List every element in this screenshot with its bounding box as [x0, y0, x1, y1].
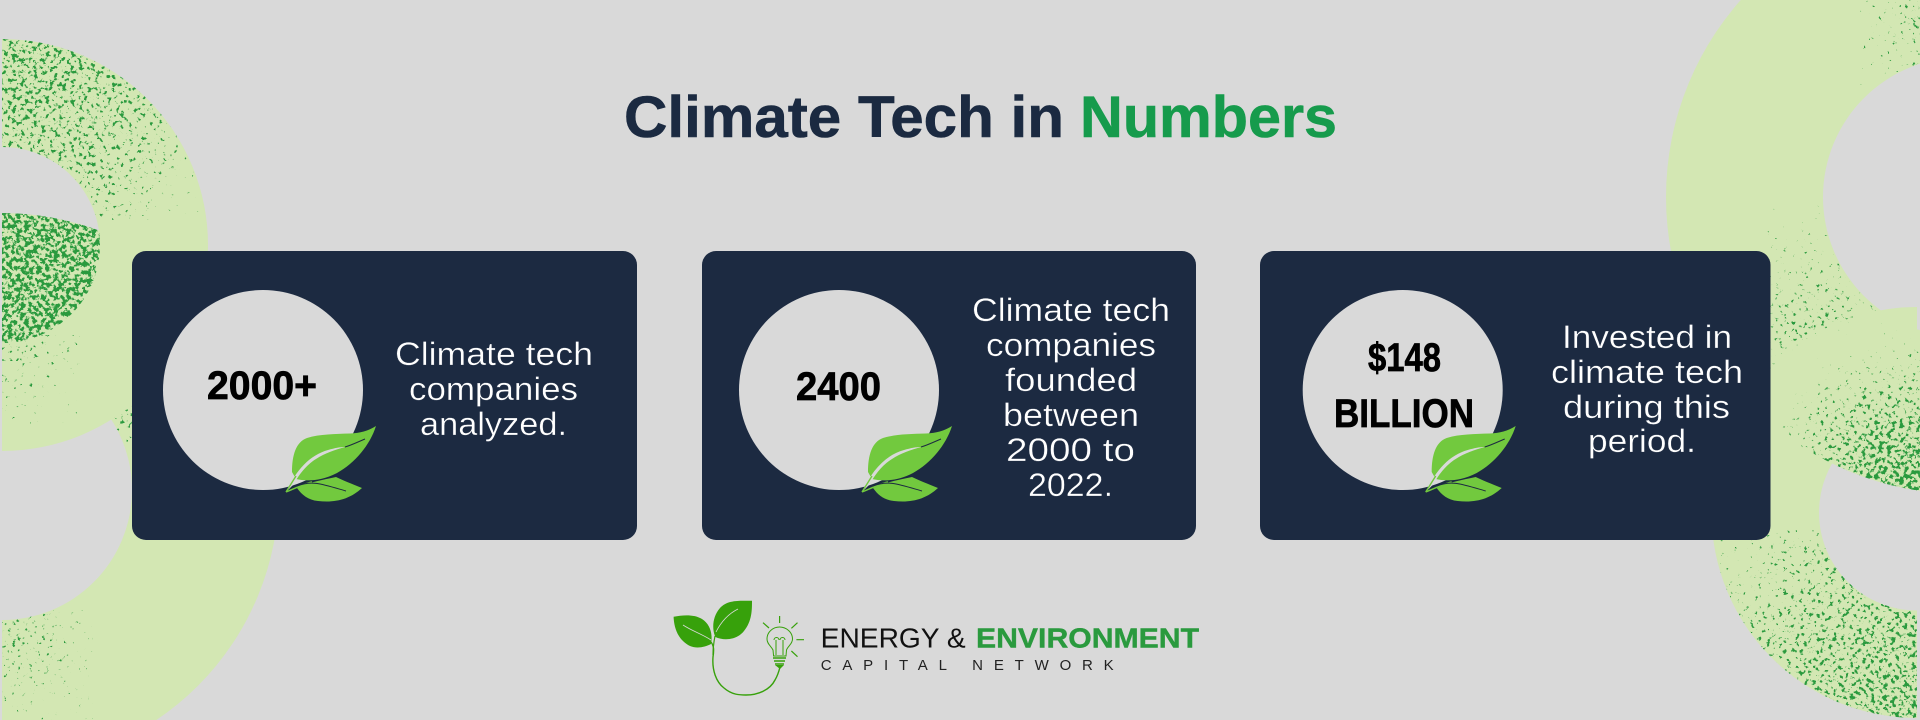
logo: Energy & Environment Capital Network	[674, 601, 1199, 695]
wordmark: ENERGY &	[821, 622, 966, 653]
description: Invested in	[1562, 319, 1732, 355]
number circle	[1303, 290, 1503, 490]
description: Climate tech	[972, 292, 1170, 328]
stat: $148 billion: BILLION	[1334, 392, 1474, 436]
icon: leaves	[1426, 426, 1516, 501]
description: between	[1003, 397, 1139, 433]
description: founded	[1005, 362, 1137, 398]
description	[1551, 319, 1743, 459]
title	[624, 85, 1337, 150]
decorative rings: right	[1660, 0, 1920, 720]
stat: $148 billion	[1334, 336, 1474, 436]
icon: leaves	[286, 426, 376, 501]
stat: 2400: 2400	[796, 365, 881, 409]
title: Climate Tech in	[624, 85, 1064, 150]
number circle	[739, 290, 939, 490]
description: climate tech	[1551, 354, 1743, 390]
panel: 2400 companies founded	[702, 251, 1196, 540]
card background	[702, 251, 1196, 540]
card background	[1260, 251, 1770, 540]
description: during this	[1563, 389, 1730, 425]
wordmark	[821, 622, 1199, 674]
description: companies	[986, 327, 1156, 363]
description: Climate tech	[395, 336, 593, 372]
title: Numbers	[1080, 85, 1337, 150]
icon: leaves	[862, 426, 952, 501]
decorative rings: left	[2, 0, 282, 720]
description: period.	[1588, 423, 1696, 459]
wordmark: ENVIRONMENT	[976, 622, 1199, 653]
stat: $148 billion: $148	[1368, 336, 1441, 380]
description: analyzed.	[420, 406, 567, 442]
description: companies	[409, 371, 578, 407]
description: 2000 to	[1006, 432, 1135, 468]
number circle	[163, 290, 363, 490]
icon: sprout and light bulb	[674, 601, 804, 695]
description	[395, 336, 593, 442]
panel: $148 billion invested	[1260, 251, 1770, 540]
wordmark: CAPITAL NETWORK	[821, 657, 1114, 674]
description	[972, 292, 1170, 503]
panel: 2000+ companies analyzed	[132, 251, 637, 540]
card background	[132, 251, 637, 540]
description: 2022.	[1028, 467, 1113, 503]
stat: 2000+: 2000+	[207, 364, 317, 408]
